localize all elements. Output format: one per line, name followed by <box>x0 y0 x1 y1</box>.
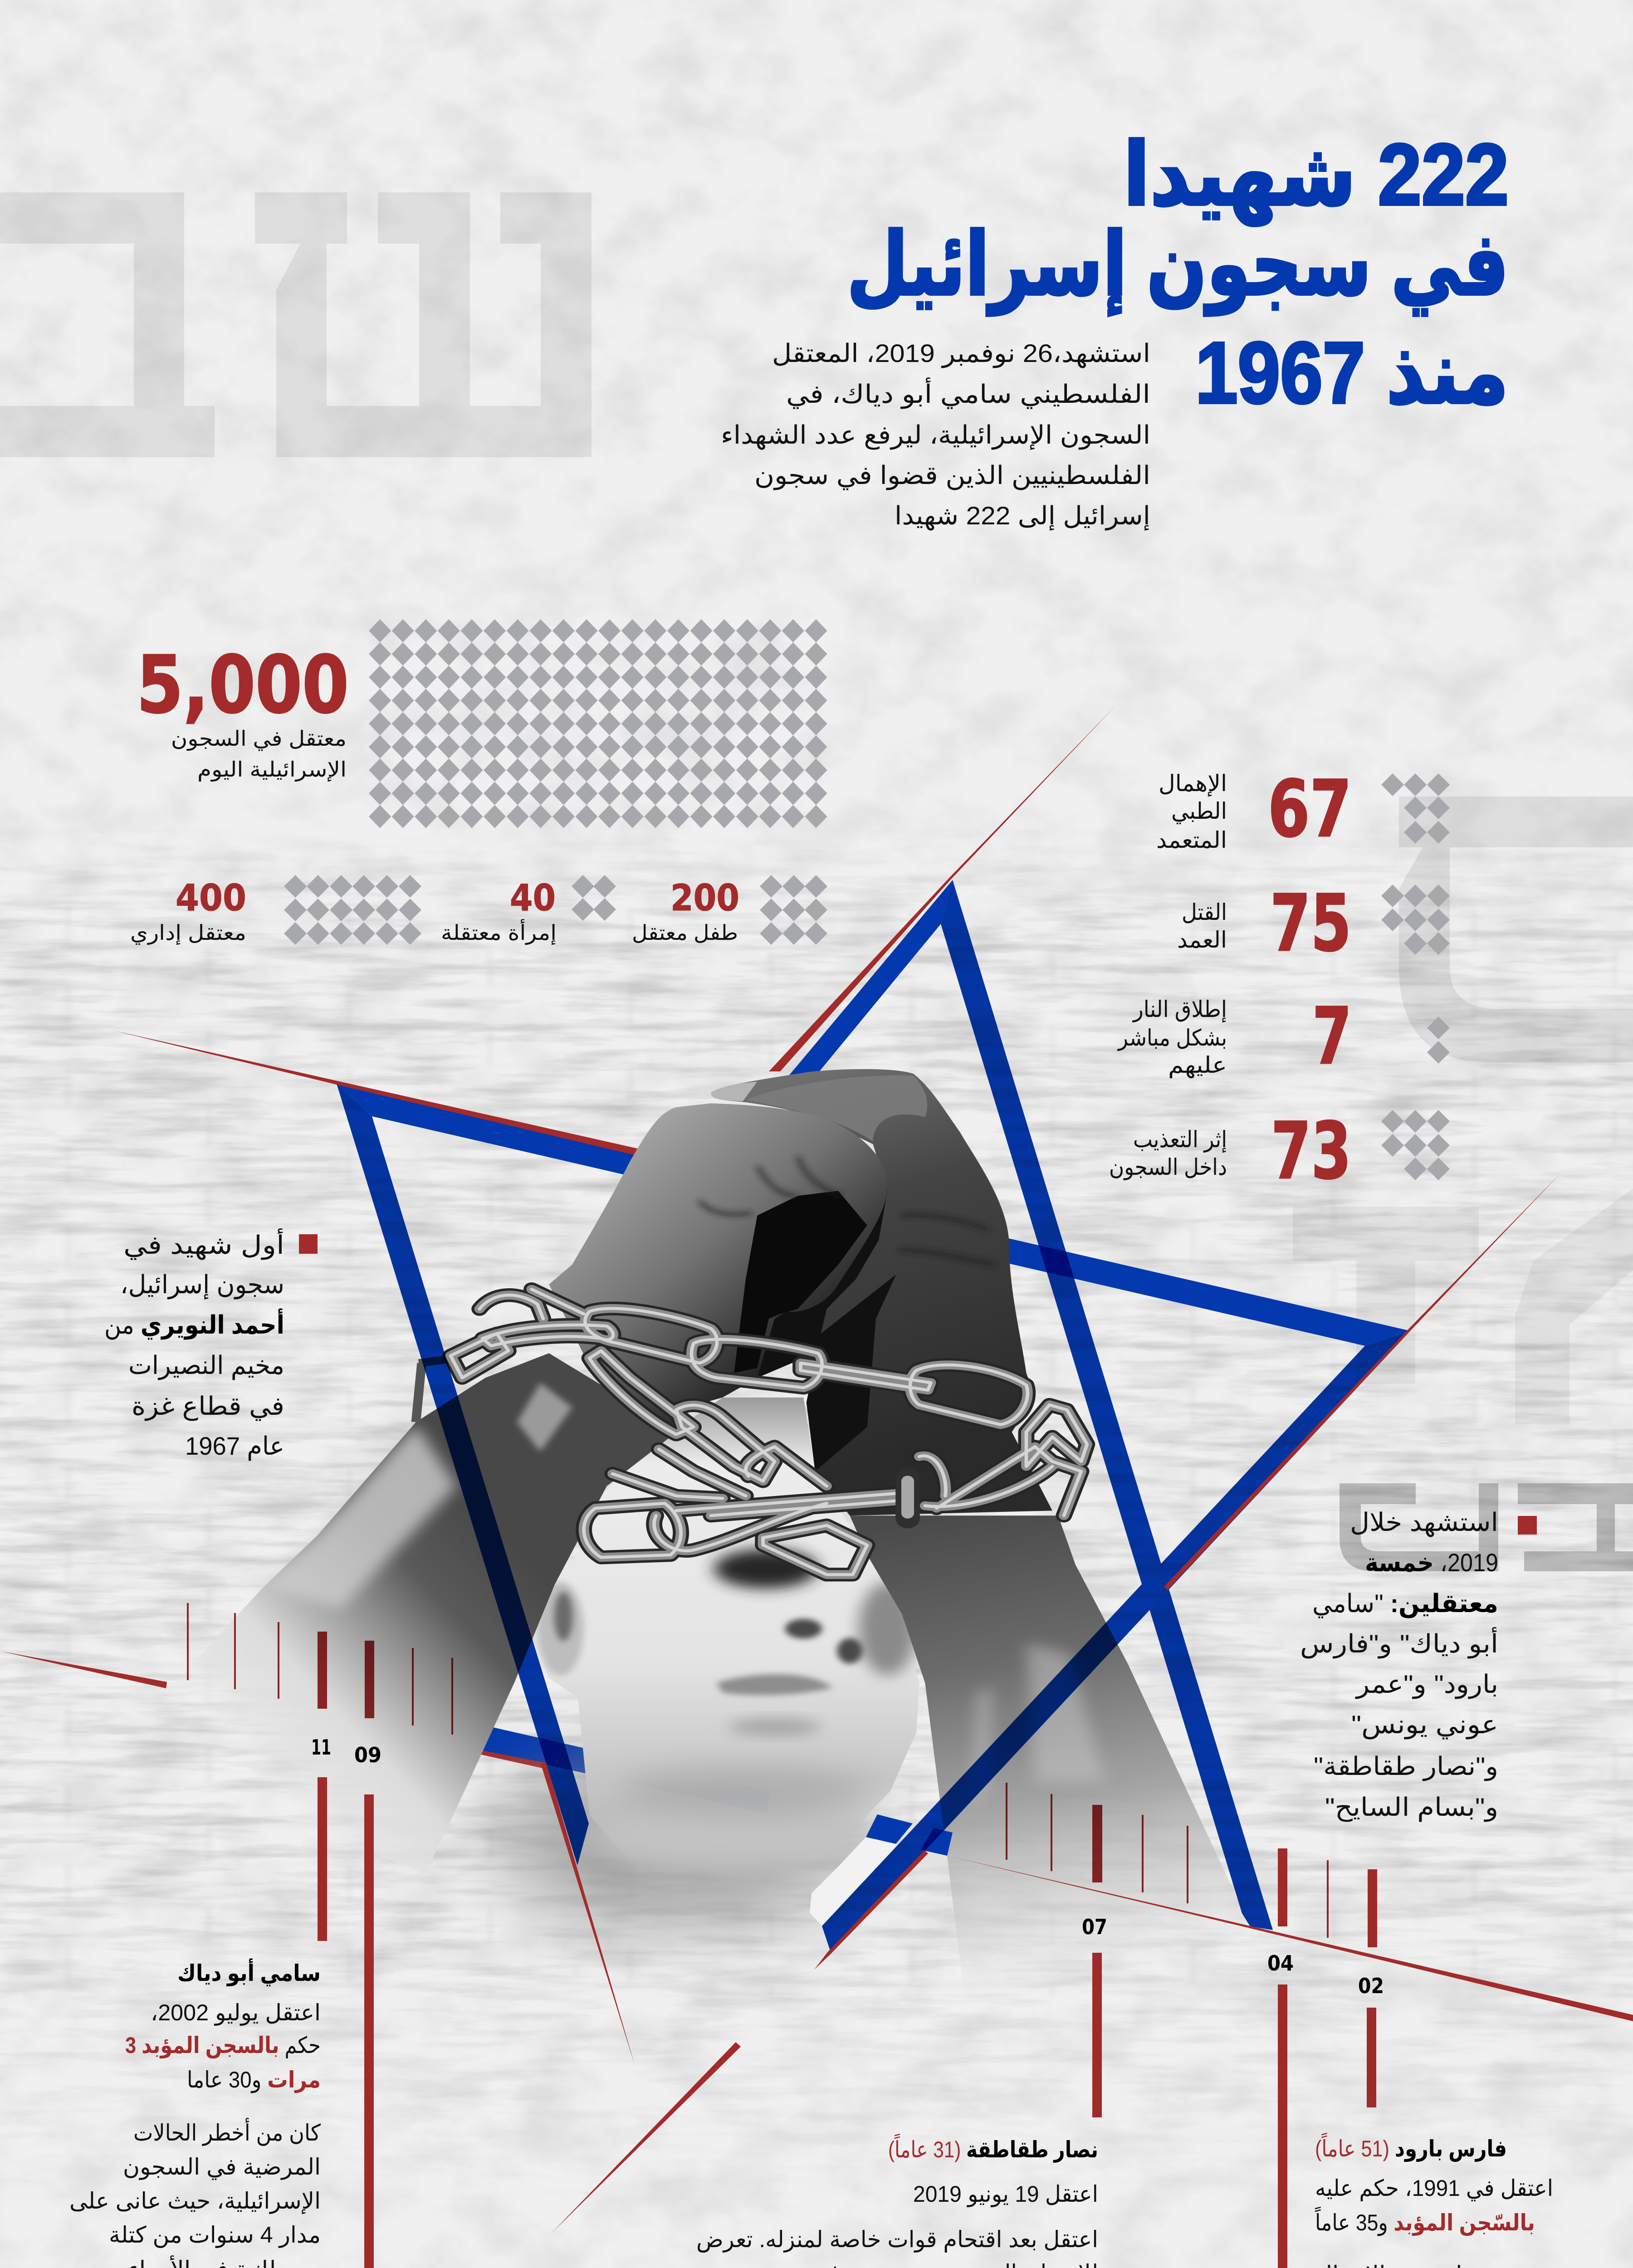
title <box>847 126 1509 421</box>
cause: 7 direct shooting: إطلاق النار <box>1132 997 1227 1023</box>
profile: Fares Baroud: فارس بارود (51 عاماً) <box>1315 2132 1507 2162</box>
chain <box>450 1289 1087 1574</box>
band: lower triangle left side <box>337 1084 589 1865</box>
profile: Fares Baroud: اعتقل في 1991، حكم عليه <box>1315 2175 1553 2201</box>
intro text: الفلسطينيين الذين قضوا في سجون <box>754 461 1150 490</box>
label: الإسرائيلية اليوم <box>197 758 347 782</box>
stat: 200 children: 200 <box>670 877 739 919</box>
callout: first martyr: عام 1967 <box>185 1432 284 1461</box>
diamonds <box>1381 885 1450 955</box>
callout: five detainees in 2019: 2019، خمسة <box>1365 1548 1498 1577</box>
profile: Sami Abu Diak: المرضية في السجون <box>123 2154 321 2180</box>
profile: Fares Baroud: بالسّجن المؤبد و35 عاماً <box>1315 2206 1535 2236</box>
timeline ticks <box>187 1603 1329 1938</box>
callout: first martyr: مخيم النصيرات <box>128 1351 284 1380</box>
callout: five detainees in 2019: معتقلين: "سامي <box>1312 1589 1498 1618</box>
background: grey letters behind right callout <box>1293 1188 1633 1571</box>
timeline marker: month 07 <box>1082 1805 1107 2117</box>
diamonds <box>284 875 421 945</box>
stat: 5,000 detainees <box>137 619 828 828</box>
stat: 40 women: 40 <box>510 877 556 919</box>
timeline marker: month 02: 02 <box>1358 1974 1384 1998</box>
intro text <box>721 339 1150 531</box>
face features <box>538 1549 916 1816</box>
profile: Nassar Taqatqa: اعتقل 19 يونيو 2019 <box>913 2181 1098 2207</box>
cause: 73 torture: 73 <box>1271 1105 1351 1197</box>
red stripe under bottom band <box>477 1750 545 1769</box>
intro text: استشهد،26 نوفمبر 2019، المعتقل <box>772 339 1150 368</box>
timeline marker: month 04: 04 <box>1267 1951 1294 1975</box>
face <box>532 1398 919 1875</box>
stat: 400 administrative <box>130 875 421 945</box>
diamond grid: 5000 <box>369 619 828 828</box>
intro text: إسرائيل إلى 222 شهيدا <box>895 501 1150 531</box>
band: top of lower triangle <box>337 1084 1410 1346</box>
star: blue bands behind the photo <box>110 705 1410 1813</box>
stat: 200 children <box>632 875 827 945</box>
stat: 40 women: إمرأة معتقلة <box>441 919 557 945</box>
timeline marker: month 09: 09 <box>354 1743 381 1767</box>
photo: chained hands and blindfolded face <box>113 1069 1250 2009</box>
dark hand folds <box>734 1191 867 1373</box>
red square <box>299 1234 318 1254</box>
red square <box>1518 1516 1537 1535</box>
cause: 75 deliberate killing: القتل <box>1182 899 1227 925</box>
chin blur <box>589 1801 867 1870</box>
cause: 67 medical neglect: المتعمد <box>1156 827 1227 853</box>
cause: 75 deliberate killing: 75 <box>1270 878 1351 969</box>
diamonds <box>760 875 827 945</box>
timeline marker: month 07: 07 <box>1082 1915 1107 1939</box>
callout: five detainees in 2019: استشهد خلال <box>1350 1508 1498 1537</box>
callout: five detainees in 2019: و"بسام السايح" <box>1325 1793 1498 1822</box>
intro text: السجون الإسرائيلية، ليرفع عدد الشهداء <box>721 420 1150 450</box>
callout: first martyr: في قطاع غزة <box>132 1392 284 1421</box>
callout: five detainees in 2019: و"نصار طقاطقة" <box>1314 1752 1498 1781</box>
star: bottom band right segments <box>866 1814 953 1856</box>
diamonds <box>1381 773 1450 844</box>
thin red line top right <box>769 705 1116 1071</box>
profile: Sami Abu Diak: مدار 4 سنوات من كتلة <box>109 2222 321 2248</box>
cause: 7 direct shooting <box>1117 991 1450 1082</box>
long red line to right edge <box>947 1856 1633 2021</box>
intro text: الفلسطيني سامي أبو دياك، في <box>786 377 1150 409</box>
band: bottom of upper triangle <box>478 1726 771 1813</box>
right hand <box>711 1069 1052 1515</box>
cause: 7 direct shooting: عليهم <box>1168 1052 1227 1079</box>
profile: Sami Abu Diak: الإسرائيلية، حيث عانى على <box>69 2188 321 2214</box>
wrist light patch <box>517 1383 572 1452</box>
cause: 67 medical neglect: الإهمال <box>1159 771 1227 797</box>
callout: first martyr: أول شهيد في <box>123 1228 284 1260</box>
finger highlight <box>746 1075 927 1142</box>
cause: 67 medical neglect <box>1156 763 1450 855</box>
band: upper triangle right side <box>941 880 1273 1930</box>
profile: Sami Abu Diak: اعتقل يوليو 2002، <box>151 2000 321 2026</box>
background: large grey letter right <box>1399 797 1633 1062</box>
cause: 7 direct shooting: بشكل مباشر <box>1117 1025 1227 1051</box>
timeline marker: month 02 <box>1358 1869 1384 2107</box>
callout: first martyr <box>104 1228 318 1461</box>
gap filler between hands <box>757 1122 902 1378</box>
stat: 400 administrative: 400 <box>176 877 246 919</box>
star: blue bands over the photo <box>337 880 1410 1952</box>
red line along right tip <box>1164 1173 1560 1590</box>
knuckle creases <box>699 1156 994 1265</box>
title: منذ 1967 <box>1195 324 1509 421</box>
number 5,000: 5,000 <box>137 639 349 731</box>
timeline marker: month 04 <box>1267 1848 1294 2268</box>
forearm light streaks <box>971 1643 1105 1815</box>
label: معتقل في السجون <box>171 727 347 751</box>
diagonal red line under the photo <box>551 2042 741 2234</box>
red line on left of face <box>541 1763 635 2066</box>
profile: Fares Baroud <box>1315 2132 1558 2268</box>
label <box>171 727 347 782</box>
callout: first martyr: سجون إسرائيل، <box>120 1270 284 1300</box>
diamonds <box>1381 1110 1450 1180</box>
timeline marker: month 11 <box>311 1632 331 1941</box>
red stripe over top band <box>110 1030 645 1158</box>
stat: 40 women <box>441 875 616 945</box>
timeline marker: month 09 <box>354 1641 381 2268</box>
profile: Sami Abu Diak: حكم بالسجن المؤبد 3 <box>125 2033 321 2059</box>
callout: five detainees in 2019: عوني يونس" <box>1351 1710 1498 1740</box>
profile: Sami Abu Diak: كان من أخطر الحالات <box>133 2118 321 2146</box>
background: large grey letters top left <box>0 192 592 457</box>
timeline marker: month 11: 11 <box>311 1735 331 1760</box>
red line at lower tip <box>814 1850 928 1970</box>
cause: 73 torture: إثر التعذيب <box>1133 1127 1227 1153</box>
cause: 75 deliberate killing: العمد <box>1177 927 1227 953</box>
cause: 73 torture: داخل السجون <box>1109 1154 1227 1180</box>
callout: five detainees in 2019 <box>1300 1508 1537 1822</box>
thumb highlight <box>711 1082 757 1101</box>
chain lock <box>898 1479 917 1518</box>
cause: 7 direct shooting: 7 <box>1312 991 1352 1082</box>
profile: Sami Abu Diak: مرات و30 عاما <box>187 2067 321 2093</box>
diamonds <box>1427 1017 1450 1064</box>
left hand <box>549 1103 887 1432</box>
profile: Sami Abu Diak: سامي أبو دياك <box>177 1958 321 1987</box>
profile: Nassar Taqatqa <box>668 2133 1098 2268</box>
neck shadow <box>497 1752 856 1929</box>
profile: Nassar Taqatqa: نصار طقاطقة (31 عاماً) <box>888 2133 1098 2163</box>
band: lower triangle right side <box>822 1331 1410 1952</box>
band: apex left side <box>778 880 953 1089</box>
profile: Nassar Taqatqa: اعتقل بعد اقتحام قوات خاصة لمنزله. تعرض <box>696 2227 1098 2253</box>
cause: 67 medical neglect: 67 <box>1268 763 1352 855</box>
callout: five detainees in 2019: بارود" و"عمر <box>1355 1670 1498 1699</box>
right forearm <box>850 1515 1250 2009</box>
title: 222 شهيدا <box>1123 126 1509 226</box>
cause: 75 deliberate killing <box>1177 878 1450 969</box>
red accent lines <box>0 1173 1633 2234</box>
short red line left edge <box>0 1651 167 1688</box>
left forearm <box>113 1353 670 1874</box>
callout: five detainees in 2019: أبو دياك" و"فارس <box>1300 1627 1498 1659</box>
cause: 73 torture <box>1109 1105 1450 1197</box>
left lock <box>416 1358 456 1422</box>
forearm lit edge <box>263 1425 456 1609</box>
stat: 200 children: طفل معتقل <box>632 921 738 944</box>
cause: 67 medical neglect: الطبي <box>1171 798 1227 824</box>
profile: Sami Abu Diak <box>69 1958 321 2268</box>
callout: first martyr: أحمد النويري من <box>104 1308 284 1340</box>
diamonds <box>572 875 616 921</box>
photo: white collar patch <box>810 1837 898 1926</box>
stat: 400 administrative: معتقل إداري <box>130 921 246 945</box>
